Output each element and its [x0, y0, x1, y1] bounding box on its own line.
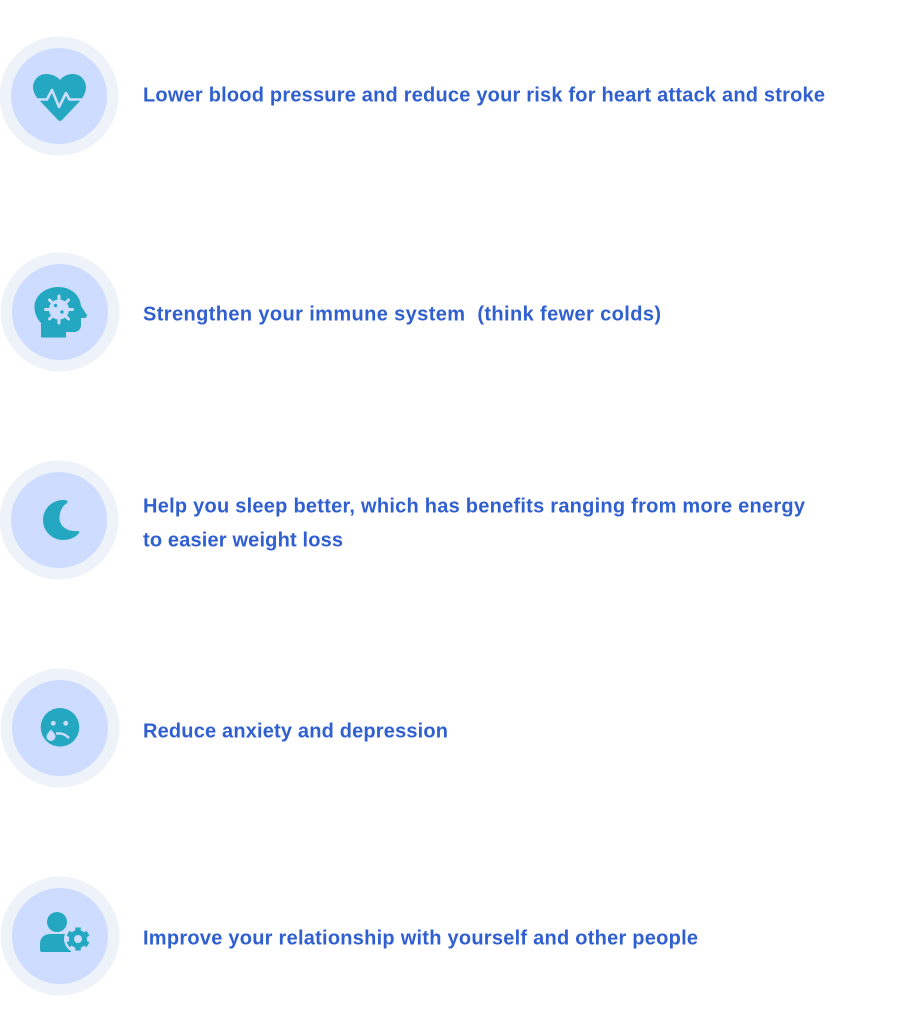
text: immune benefit: Strengthen your immune system (think fewer colds) — [143, 304, 661, 326]
icon badge: person with gear — [0, 876, 120, 996]
benefit row: sleep: to easier weight loss — [143, 530, 343, 552]
text: relationship benefit: Improve your relationship with yourself and other people — [143, 928, 698, 950]
text: heart benefit: Lower blood pressure and reduce your risk for heart attack and stroke — [143, 84, 825, 106]
icon badge: moon — [0, 460, 118, 580]
text: sleep benefit: Help you sleep better, which has benefits ranging from more energy — [143, 496, 806, 518]
icon badge: head with virus — [0, 252, 120, 372]
benefit row: sleep — [0, 460, 806, 580]
benefit row: anxiety — [0, 668, 448, 788]
benefit row: relationships — [0, 876, 698, 996]
icon badge: crying face — [0, 668, 120, 788]
text: anxiety benefit: Reduce anxiety and depression — [143, 720, 448, 742]
benefit row: immune — [0, 252, 661, 372]
icon badge: heart — [0, 36, 118, 156]
benefit row: heart — [0, 36, 825, 156]
